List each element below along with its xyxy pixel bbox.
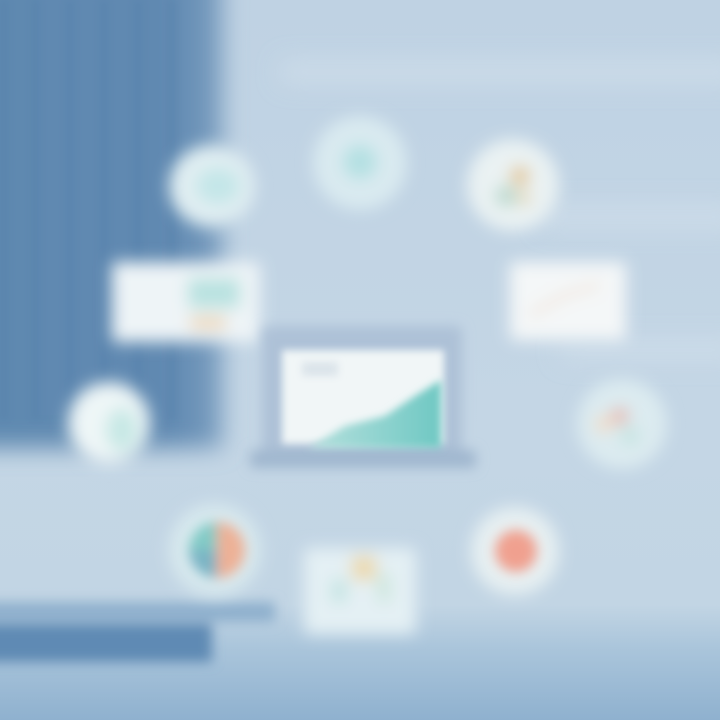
icon: top-right multicolor circle — [467, 139, 559, 231]
chart caption — [302, 362, 338, 376]
icon: top-left teal circle — [169, 145, 255, 227]
panel: central laptop with area chart — [250, 326, 476, 468]
laptop body — [250, 326, 476, 468]
panel: bottom-center card — [304, 548, 416, 634]
panel: right chart card — [510, 262, 626, 340]
icon: bottom-left pie circle — [169, 504, 261, 596]
panel: dark striped wall — [0, 0, 222, 448]
panel: soft background streaks — [280, 60, 720, 360]
panel: left chart card — [112, 262, 260, 342]
laptop screen — [282, 350, 444, 444]
icon: left globe circle — [68, 382, 150, 464]
icon: top-center teal circle — [313, 116, 407, 210]
icon: right multicolor circle — [577, 379, 667, 469]
icon: bottom-right coral circle — [471, 507, 559, 595]
area chart — [308, 380, 441, 448]
panel: dark bottom bar — [0, 602, 275, 662]
